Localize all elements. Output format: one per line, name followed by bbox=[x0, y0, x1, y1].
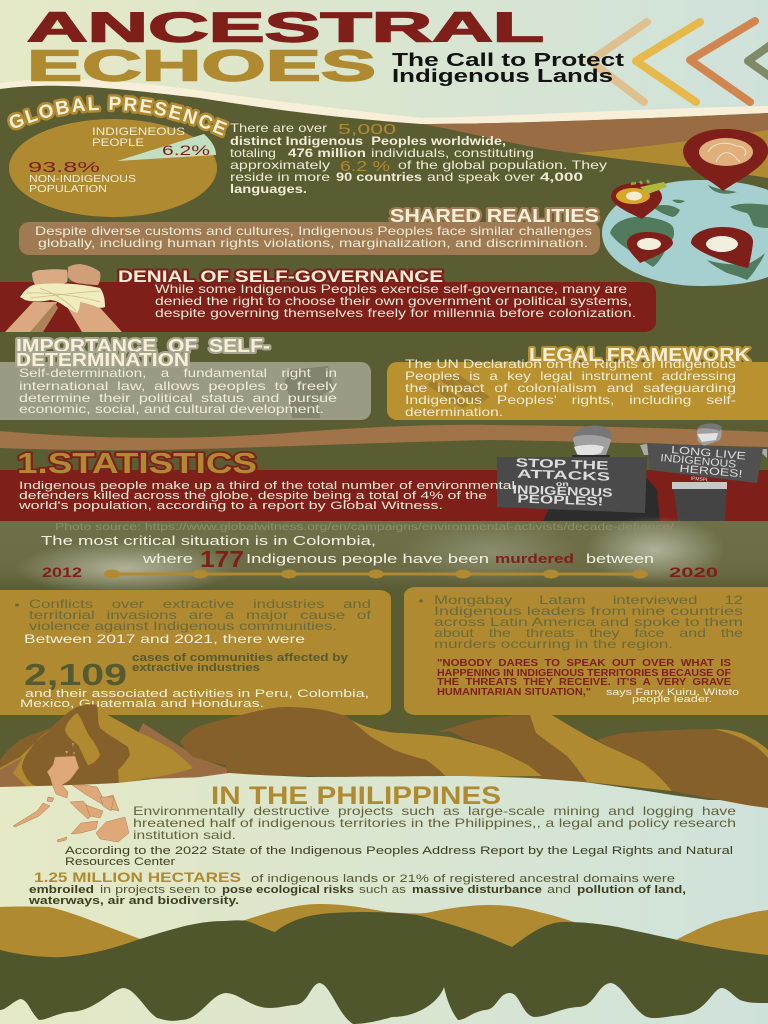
pie labels: NON-INDIGENOUS bbox=[29, 174, 136, 185]
colombia text: 177 bbox=[200, 546, 244, 572]
hectares text: and bbox=[547, 884, 571, 896]
body text: hreatened half of indigenous territories in the Philippines,, a legal and policy research bbox=[133, 816, 736, 830]
left banner: STOP THE bbox=[515, 455, 609, 473]
bulleted text: Indigenous leaders from nine countries bbox=[434, 604, 743, 618]
left person bbox=[572, 425, 612, 458]
hectares text: pollution of land, bbox=[577, 884, 686, 896]
heading: DENIAL OF SELF-GOVERNANCE bbox=[118, 267, 443, 286]
intro text: of the global population. They bbox=[398, 158, 607, 172]
panel: in the philippines bbox=[28, 782, 736, 907]
bulleted text: violence against Indigenous communities. bbox=[29, 619, 337, 633]
pie labels: 6.2% bbox=[162, 142, 210, 158]
heading bbox=[16, 336, 270, 370]
bottom gold hills bbox=[0, 904, 768, 960]
body text: determination. bbox=[405, 405, 503, 419]
cases text bbox=[132, 652, 349, 674]
bulleted text: about the threats they face and the bbox=[434, 626, 743, 640]
body text: the impact of colonialism and safeguarding bbox=[405, 381, 736, 395]
pie labels: POPULATION bbox=[29, 184, 107, 195]
panel: shared realities bbox=[19, 206, 600, 255]
report text: According to the 2022 State of the Indigenous Peoples Address Report by the Legal Rights and Natural bbox=[65, 845, 733, 857]
bottom dark hills bbox=[0, 912, 768, 1024]
intro text: 476 million bbox=[288, 146, 366, 160]
title: ANCESTRAL bbox=[27, 4, 544, 50]
bulleted text bbox=[419, 593, 743, 651]
icon: stripes bbox=[427, 374, 490, 408]
body text bbox=[133, 804, 736, 842]
body text bbox=[405, 357, 736, 419]
panel: statistics bbox=[0, 423, 768, 521]
subtitle: Indigenous Lands bbox=[392, 66, 613, 86]
intro text: approximately bbox=[230, 158, 330, 172]
left mountain bbox=[0, 704, 227, 790]
intro text: totaling bbox=[230, 146, 276, 160]
heading: DETERMINATION bbox=[16, 350, 189, 370]
pie labels: 93.8% bbox=[28, 159, 100, 176]
curved heading: GLOBAL PRESENCE bbox=[7, 94, 230, 138]
body text: The UN Declaration on the Rights of Indigenous bbox=[405, 357, 736, 371]
brown hill bbox=[421, 113, 768, 153]
body text: economic, social, and cultural development. bbox=[19, 402, 324, 416]
left banner: on bbox=[556, 481, 569, 488]
body text: denied the right to choose their own government or political systems, bbox=[155, 294, 632, 308]
bulleted text: Mongabay Latam interviewed 12 bbox=[434, 593, 743, 607]
colombia text: where bbox=[142, 551, 193, 566]
intro text: distinct Indigenous Peoples worldwide, bbox=[230, 134, 506, 148]
photo source: Photo source: https://www.globalwitness.org/en/campaigns/environmental-activists/decade-defiance/ bbox=[55, 522, 674, 533]
panel: conflicts bbox=[0, 590, 391, 715]
hectares text: of indigenous lands or 21% of registered ancestral domains were bbox=[251, 873, 675, 885]
pie chart bbox=[9, 119, 217, 217]
panel: legal framework bbox=[387, 345, 768, 420]
icon: globe with pins bbox=[602, 129, 768, 286]
colombia text: Indigenous people have been bbox=[246, 551, 489, 566]
heading: 1.STATISTICS bbox=[17, 448, 257, 480]
icon: small pin bbox=[627, 232, 673, 263]
hectares text: waterways, air and biodiversity. bbox=[28, 895, 239, 907]
panel: colombia timeline bbox=[0, 516, 768, 596]
text: associated activities: and their associated activities in Peru, Colombia, bbox=[25, 688, 369, 700]
body text: world's population, according to a report by Global Witness. bbox=[18, 500, 443, 512]
heading: IMPORTANCE OF SELF- bbox=[16, 336, 270, 356]
panel: global presence bbox=[7, 94, 607, 217]
icon: whistle pin bbox=[611, 180, 667, 219]
intro text: and speak over bbox=[427, 170, 535, 184]
attribution bbox=[606, 687, 739, 704]
hectares text: pose ecological risks bbox=[222, 884, 354, 896]
quote: "NOBODY DARES TO SPEAK OUT OVER WHAT IS bbox=[437, 657, 731, 669]
colombia text: The most critical situation is in Colombia, bbox=[41, 533, 376, 548]
hectares text bbox=[28, 869, 686, 907]
body text: Environmentally destructive projects such as large-scale mining and logging have bbox=[133, 804, 736, 818]
subtitle: The Call to Protect bbox=[392, 50, 624, 70]
big number: 2,109 bbox=[24, 657, 127, 692]
body text: international law, allows peoples to freely bbox=[19, 379, 337, 393]
photo: protesters with banners bbox=[497, 423, 767, 521]
cases text: cases of communities affected by bbox=[132, 652, 349, 664]
intro text: There are over bbox=[230, 121, 327, 135]
bulleted text bbox=[15, 597, 372, 633]
cream wave stripe bbox=[0, 79, 768, 124]
text: associated activities: Mexico, Guatemala and Honduras. bbox=[20, 698, 264, 710]
pie labels: INDIGENEOUS bbox=[92, 126, 185, 138]
icon: medium pin bbox=[691, 227, 753, 268]
body text: globally, including human rights violations, marginalization, and discrimination. bbox=[38, 236, 588, 250]
hectares text: 1.25 MILLION HECTARES bbox=[34, 869, 241, 885]
attribution: people leader. bbox=[632, 694, 712, 704]
timeline bbox=[42, 564, 718, 580]
subtitle bbox=[392, 50, 624, 86]
intro text: 4,000 bbox=[540, 170, 583, 184]
panel: denial of self-governance bbox=[0, 264, 656, 332]
report text bbox=[65, 845, 733, 868]
body text: Peoples is a key legal instrument addressing bbox=[405, 369, 736, 383]
intro text: individuals, constituting bbox=[371, 146, 534, 160]
hectares text: such as bbox=[359, 884, 407, 896]
right banner: HEROES! bbox=[679, 463, 743, 480]
pie labels bbox=[28, 126, 210, 195]
colombia text: between bbox=[586, 551, 654, 566]
hectares text: massive disturbance bbox=[412, 884, 542, 896]
chevrons bbox=[590, 21, 768, 102]
bulleted text: across Latin America and spoke to them bbox=[434, 615, 743, 629]
body text bbox=[155, 282, 636, 320]
right banner: INDIGENOUS bbox=[660, 452, 737, 471]
body text: While some Indigenous Peoples exercise self-governance, many are bbox=[155, 282, 627, 296]
body text: Self-determination, a fundamental right in bbox=[19, 366, 337, 380]
body text: despite governing themselves freely for millennia before colonization. bbox=[155, 306, 636, 320]
heading: LEGAL FRAMEWORK bbox=[529, 345, 750, 365]
olive ground under panels bbox=[0, 590, 768, 800]
right dark hill gold edge bbox=[714, 729, 768, 760]
title bbox=[27, 4, 544, 90]
hectares text: in projects seen to bbox=[100, 884, 216, 896]
left banner: PEOPLES! bbox=[517, 492, 604, 509]
intro text: 90 countries bbox=[336, 170, 422, 184]
body text bbox=[19, 366, 337, 416]
cases text: extractive industries bbox=[132, 662, 260, 674]
heading: SHARED REALITIES bbox=[390, 206, 599, 226]
body text: Indigenous people make up a third of the total number of environmental bbox=[19, 480, 515, 492]
quote: HUMANITARIAN SITUATION," bbox=[437, 686, 591, 698]
body text: determine their political status and pursue bbox=[19, 391, 337, 405]
intro text: 5,000 bbox=[338, 121, 396, 138]
body text: defenders killed across the globe, despite being a total of 4% of the bbox=[19, 490, 487, 502]
olive main field bbox=[0, 85, 768, 800]
intro text: 6.2 % bbox=[340, 158, 390, 175]
pie labels: PEOPLE bbox=[92, 137, 144, 149]
icon: large pin bbox=[683, 129, 768, 191]
colombia text bbox=[41, 533, 654, 572]
body text: Indigenous Peoples' rights, including self- bbox=[405, 393, 736, 407]
right banner bbox=[647, 443, 763, 486]
heading: IN THE PHILIPPINES bbox=[211, 782, 501, 810]
body text: institution said. bbox=[133, 828, 236, 842]
intro text: languages. bbox=[230, 182, 307, 196]
timeline: 2012 bbox=[42, 564, 82, 580]
timeline: 2020 bbox=[669, 564, 718, 580]
intro text bbox=[230, 121, 607, 196]
colombia text: murdered bbox=[495, 551, 574, 566]
title: ECHOES bbox=[27, 42, 376, 90]
brown wave band bbox=[0, 425, 768, 450]
text: associated activities bbox=[20, 688, 369, 710]
right banner: IPMSPL bbox=[690, 476, 709, 483]
attribution: says Fany Kuiru, Witoto bbox=[606, 687, 739, 697]
body text bbox=[18, 480, 515, 512]
bulleted text: territorial invasions are a major cause of bbox=[29, 608, 372, 622]
icon: philippines map bbox=[13, 743, 129, 842]
icon: bound hands bbox=[5, 264, 122, 332]
body text: Despite diverse customs and cultures, Indigenous Peoples face similar challenges bbox=[35, 224, 592, 238]
intro text: reside in more bbox=[230, 170, 330, 184]
bulleted text: Conflicts over extractive industries and bbox=[29, 597, 371, 611]
gold ridge right bbox=[530, 715, 672, 791]
mountains bbox=[0, 704, 768, 809]
pale lower section bbox=[0, 773, 768, 1024]
right banner: LONG LIVE bbox=[671, 444, 746, 463]
hectares text: embroiled bbox=[29, 884, 94, 896]
left banner: ATTACKS bbox=[517, 467, 610, 484]
right hill bbox=[597, 729, 768, 809]
icon: raised fist bbox=[284, 366, 334, 418]
quote: THE THREATS THEY RECEIVE. IT'S A VERY GRAVE bbox=[437, 676, 731, 688]
middle hill bbox=[180, 707, 446, 778]
right person bbox=[697, 423, 722, 446]
quote: HAPPENING IN INDIGENOUS TERRITORIES BECAUSE OF bbox=[437, 667, 732, 679]
hill 2 bbox=[434, 715, 587, 782]
left banner bbox=[497, 455, 647, 513]
panel: mongabay bbox=[404, 587, 768, 715]
panel: importance of self-determination bbox=[0, 336, 371, 420]
bulleted text: murders occurring in the region. bbox=[434, 637, 673, 651]
left banner: INDIGENOUS bbox=[512, 482, 613, 500]
gold ridge bbox=[339, 713, 542, 777]
body text bbox=[35, 224, 592, 250]
quote bbox=[437, 657, 732, 698]
text: between years: Between 2017 and 2021, there were bbox=[24, 632, 305, 646]
report text: Resources Center bbox=[65, 856, 175, 868]
gold hill bbox=[573, 128, 768, 178]
